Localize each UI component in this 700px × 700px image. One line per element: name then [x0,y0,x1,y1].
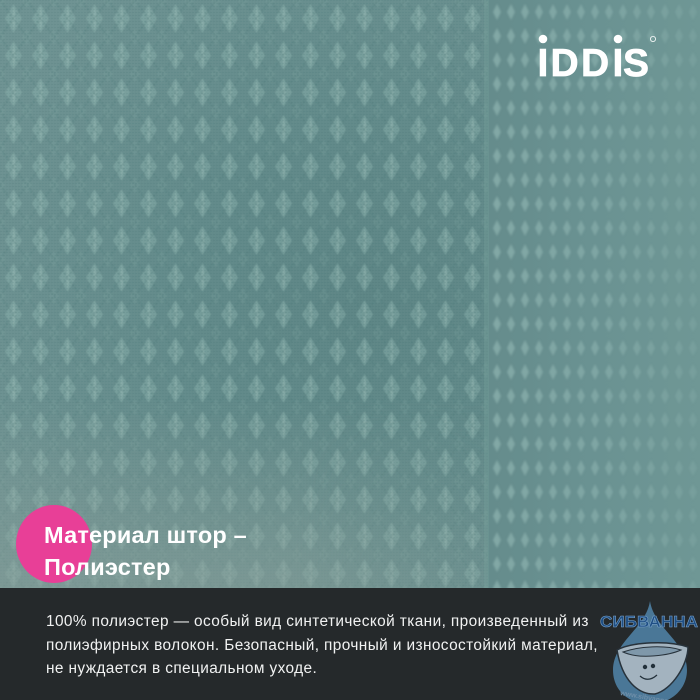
dark description bar [0,588,700,700]
logo: IDDIS: IDDIS [538,42,649,85]
heading: material: Полиэстер [44,554,171,580]
description text: полиэфирных волокон. Безопасный, прочный и износостойкий материал, [46,636,598,654]
description text: 100% полиэстер — особый вид синтетической ткани, произведенный из [46,613,589,630]
description text: не нуждается в специальном уходе. [46,660,317,677]
heading: material: Материал штор – [44,522,247,548]
heading: material [44,522,247,580]
pink accent circle [16,505,92,583]
description text [46,613,598,677]
watermark: Sibvanna logo: СИБВАННА [600,614,698,631]
